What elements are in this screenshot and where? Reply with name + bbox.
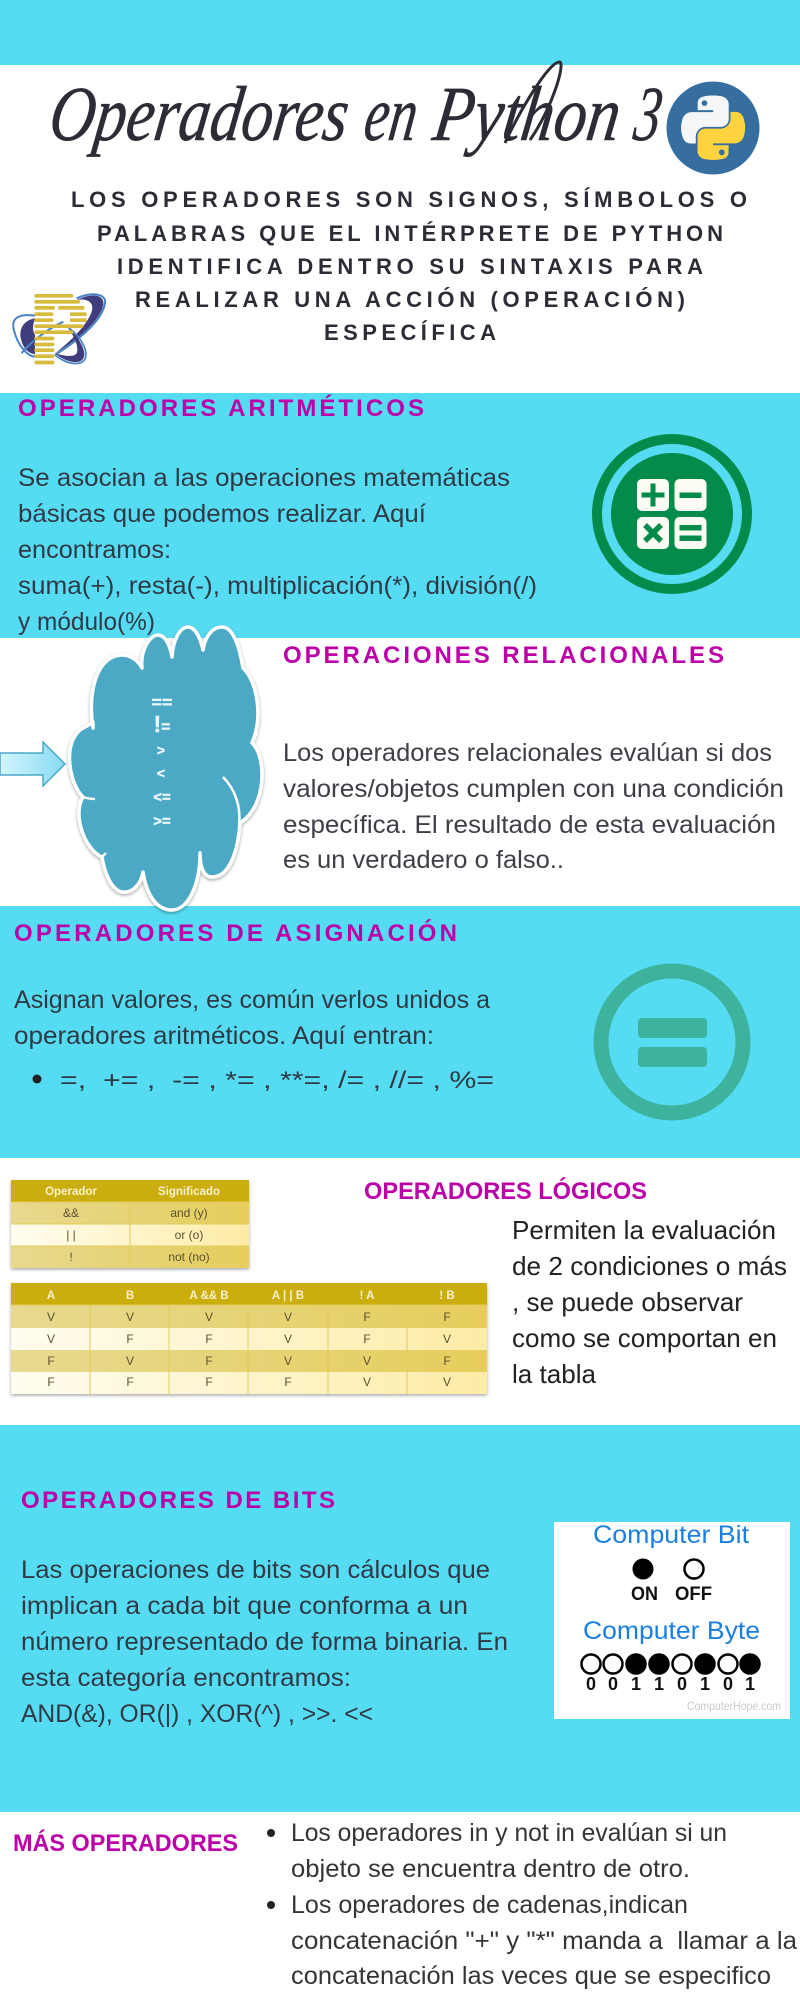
list: assignment operators: =, += , -= , *= , **=, /= , //= , %= (60, 1067, 494, 1094)
table: truth table: V (284, 1332, 292, 1346)
figure: computer bit and byte: OFF (675, 1584, 712, 1605)
table: logical operators: or (o) (175, 1228, 203, 1242)
title: en (359, 72, 424, 158)
panel: asignación background (0, 906, 800, 1158)
text: relacionales body: es un verdadero o falso.. (283, 846, 564, 874)
table: logical operators: | | (66, 1228, 76, 1242)
text: bits body: implican a cada bit que conforma a un (21, 1592, 468, 1620)
heading: relacionales: OPERACIONES RELACIONALES (283, 642, 724, 669)
table: truth table: F (443, 1354, 451, 1368)
table: truth table: B (126, 1290, 134, 1302)
table: truth table: V (126, 1310, 134, 1324)
table: truth table: F (205, 1375, 213, 1389)
text: aritméticos body: encontramos: (18, 536, 171, 564)
title (44, 62, 668, 158)
list: más operadores: concatenación las veces que se especifico (291, 1962, 771, 1990)
table: truth table: V (205, 1310, 213, 1324)
cloud: relational operators: == (152, 693, 173, 712)
cloud: relational operators (70, 627, 262, 910)
text: aritméticos body: y módulo(%) (18, 608, 155, 636)
table: truth table: F (126, 1375, 134, 1389)
table: logical operators: and (y) (170, 1206, 208, 1220)
text: aritméticos body: suma(+), resta(-), multiplicación(*), división(/) (18, 572, 537, 600)
table: logical operators (11, 1180, 249, 1268)
list: más operadores: Los operadores in y not in evalúan si un (291, 1819, 727, 1847)
table: truth table: F (47, 1375, 55, 1389)
panel: aritméticos background (0, 393, 800, 638)
table: truth table: V (47, 1332, 55, 1346)
text: bits body: número representado de forma binaria. En (21, 1628, 508, 1656)
text: aritméticos body: básicas que podemos realizar. Aquí (18, 500, 426, 528)
text: lógicos body: , se puede observar (512, 1287, 743, 1317)
figure: computer bit and byte: 1 (631, 1674, 641, 1694)
text: asignación body (14, 986, 490, 1050)
figure: computer bit and byte: 1 (700, 1674, 710, 1694)
table: truth table: F (205, 1332, 213, 1346)
figure: computer bit and byte (554, 1521, 790, 1719)
cloud: relational operators: > (157, 742, 165, 758)
table: logical operators: Significado (158, 1186, 220, 1198)
text: lógicos body (512, 1215, 787, 1389)
figure: computer bit and byte: ComputerHope.com (687, 1699, 781, 1713)
text: bits body: AND(&), OR(|) , XOR(^) , >>. << (21, 1700, 373, 1728)
heading: más operadores: MÁS OPERADORES (13, 1829, 238, 1857)
cloud: relational operators: != (153, 711, 171, 737)
text: aritméticos body: Se asocian a las operaciones matemáticas (18, 464, 510, 492)
table: truth table: F (284, 1375, 292, 1389)
table: truth table: F (47, 1354, 55, 1368)
text: asignación body: operadores aritméticos. Aquí entran: (14, 1022, 434, 1050)
text: bits body: Las operaciones de bits son cálculos que (21, 1556, 490, 1584)
figure: computer bit and byte: 0 (677, 1674, 687, 1694)
text: aritméticos body (18, 464, 537, 636)
title: Operadores (44, 72, 355, 158)
icon: python logo (666, 82, 760, 174)
heading: asignación: OPERADORES DE ASIGNACIÓN (14, 919, 457, 947)
intro text: REALIZAR UNA ACCIÓN (OPERACIÓN) (135, 287, 685, 312)
text: relacionales body: valores/objetos cumplen con una condición (283, 775, 784, 803)
text: relacionales body: Los operadores relacionales evalúan si dos (283, 739, 772, 767)
table: truth table: ! B (439, 1290, 455, 1302)
cloud: relational operators: <= (153, 789, 171, 806)
text: lógicos body: Permiten la evaluación (512, 1215, 776, 1245)
panel: bits background (0, 1425, 800, 1812)
icon: equals sign (601, 971, 743, 1113)
intro text (71, 187, 747, 345)
table: truth table: F (205, 1354, 213, 1368)
table: truth table: V (126, 1354, 134, 1368)
text: lógicos body: de 2 condiciones o más (512, 1251, 787, 1281)
table: logical operators: Operador (45, 1186, 97, 1198)
figure: computer bit and byte: Computer Bit (593, 1521, 749, 1549)
figure: computer bit and byte: 0 (586, 1674, 596, 1694)
heading: lógicos: OPERADORES LÓGICOS (364, 1177, 647, 1205)
table: logical operators: && (63, 1206, 79, 1220)
heading: bits: OPERADORES DE BITS (21, 1487, 335, 1514)
list: más operadores: objeto se encuentra dentro de otro. (291, 1855, 690, 1883)
table: truth table: V (363, 1354, 371, 1368)
table: truth table: A && B (189, 1290, 229, 1302)
text: bits body (21, 1556, 508, 1728)
figure: computer bit and byte: ON (631, 1584, 658, 1605)
text: relacionales body (283, 739, 784, 874)
table: logical operators: ! (69, 1250, 73, 1264)
table: truth table: ! A (360, 1290, 374, 1302)
list: más operadores: Los operadores de cadenas,indican (291, 1891, 688, 1919)
table: truth table: V (443, 1375, 451, 1389)
table: truth table: A | | B (272, 1290, 304, 1302)
table: logical operators: not (no) (168, 1250, 210, 1264)
table: truth table: F (363, 1332, 371, 1346)
cloud: relational operators: < (157, 765, 165, 781)
table: truth table: V (284, 1310, 292, 1324)
list: más operadores: concatenación "+" y "*" manda a llamar a la (291, 1927, 797, 1955)
intro text: ESPECÍFICA (324, 320, 496, 345)
table: truth table: V (363, 1375, 371, 1389)
text: lógicos body: la tabla (512, 1359, 597, 1389)
top colour band (0, 0, 800, 65)
heading: aritméticos: OPERADORES ARITMÉTICOS (18, 394, 424, 422)
table: truth table: F (363, 1310, 371, 1324)
list: más operadores (267, 1819, 797, 1990)
figure: computer bit and byte: 1 (745, 1674, 755, 1694)
table: truth table: V (443, 1332, 451, 1346)
table: truth table: V (284, 1354, 292, 1368)
cloud: relational operators: >= (153, 813, 171, 830)
arrow (0, 742, 65, 786)
intro text: IDENTIFICA DENTRO SU SINTAXIS PARA (117, 254, 703, 279)
title: Python (428, 72, 627, 158)
table: truth table: F (443, 1310, 451, 1324)
figure: computer bit and byte: 1 (654, 1674, 664, 1694)
table: truth table: V (47, 1310, 55, 1324)
text: asignación body: Asignan valores, es común verlos unidos a (14, 986, 490, 1014)
table: truth table: F (126, 1332, 134, 1346)
icon: calculator keys (597, 439, 747, 589)
intro text: LOS OPERADORES SON SIGNOS, SÍMBOLOS O (71, 187, 747, 212)
figure: computer bit and byte: Computer Byte (583, 1617, 760, 1645)
text: bits body: esta categoría encontramos: (21, 1664, 351, 1692)
text: relacionales body: específica. El resultado de esta evaluación (283, 811, 776, 839)
text: lógicos body: como se comportan en (512, 1323, 777, 1353)
icon: P atom logo (13, 294, 105, 364)
figure: computer bit and byte: 0 (608, 1674, 618, 1694)
table: truth table: A (47, 1290, 55, 1302)
title: 3 (629, 72, 668, 158)
intro text: PALABRAS QUE EL INTÉRPRETE DE PYTHON (97, 221, 723, 246)
figure: computer bit and byte: 0 (723, 1674, 733, 1694)
table: truth table (11, 1283, 487, 1394)
